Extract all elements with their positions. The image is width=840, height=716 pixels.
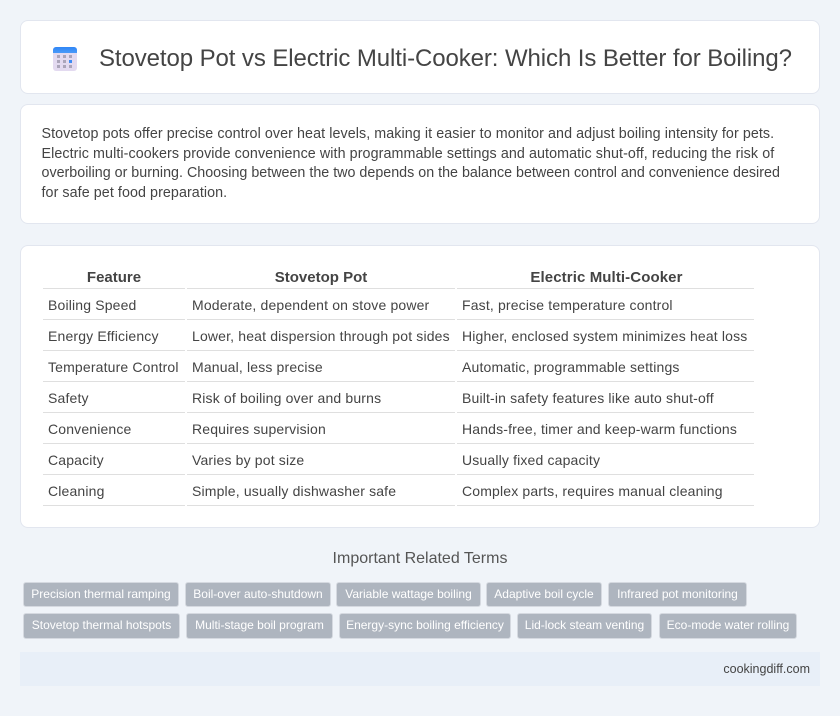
comparison table: Built-in safety features like auto shut-off: [462, 390, 714, 406]
comparison table: Automatic, programmable settings: [462, 359, 680, 375]
panel: comparison table: [20, 245, 820, 528]
comparison table: Fast, precise temperature control: [462, 297, 673, 313]
comparison table: Capacity: [48, 452, 104, 468]
tag: [23, 582, 179, 607]
tag: Lid-lock steam venting: [525, 618, 644, 632]
tag: [185, 582, 331, 607]
comparison table: Energy Efficiency: [48, 328, 159, 344]
comparison table: Cleaning: [48, 483, 105, 499]
comparison table: Boiling Speed: [48, 297, 136, 313]
tag: [659, 613, 797, 639]
column heading: Feature: Feature: [87, 269, 141, 286]
comparison table: Usually fixed capacity: [462, 452, 600, 468]
tag: Stovetop thermal hotspots: [32, 618, 171, 632]
column heading: Electric Multi-Cooker: Electric Multi-Cooker: [530, 269, 683, 286]
tag: [186, 613, 333, 639]
tag: [336, 582, 481, 607]
title: Stovetop Pot vs Electric Multi-Cooker: Which Is Better for Boiling?: [99, 45, 792, 72]
panel: introduction: [20, 104, 820, 224]
comparison table: Higher, enclosed system minimizes heat loss: [462, 328, 747, 344]
comparison table: Manual, less precise: [192, 359, 323, 375]
comparison table: Complex parts, requires manual cleaning: [462, 483, 723, 499]
tag: Precision thermal ramping: [31, 587, 171, 601]
comparison table: Hands-free, timer and keep-warm functions: [462, 421, 737, 437]
tag: [608, 582, 747, 607]
panel: header: [20, 20, 820, 94]
comparison table: Simple, usually dishwasher safe: [192, 483, 396, 499]
comparison table: Lower, heat dispersion through pot sides: [192, 328, 450, 344]
tag: Infrared pot monitoring: [617, 587, 738, 601]
text block: introduction: Stovetop pots offer precise control over heat levels, making it easier to monitor and adjust boiling intensity for pets.: [42, 126, 774, 142]
comparison table: Requires supervision: [192, 421, 326, 437]
footer: [20, 652, 820, 686]
comparison table: Risk of boiling over and burns: [192, 390, 381, 406]
comparison table: Varies by pot size: [192, 452, 304, 468]
footer: source: cookingdiff.com: [723, 662, 810, 676]
column heading: Stovetop Pot: Stovetop Pot: [275, 269, 367, 286]
icon: calendar: [53, 47, 77, 71]
tag: [517, 613, 652, 639]
heading: Important Related Terms: Important Related Terms: [333, 550, 507, 567]
comparison table: Convenience: [48, 421, 131, 437]
tag: Energy-sync boiling efficiency: [346, 618, 504, 632]
text block: introduction: overboiling or burning. Choosing between the two depends on the balance between control and convenience desired: [42, 165, 780, 181]
tag: Eco-mode water rolling: [667, 618, 789, 632]
comparison table: Temperature Control: [48, 359, 179, 375]
text block: introduction: for safe pet food preparation.: [42, 184, 227, 200]
tag: Boil-over auto-shutdown: [193, 587, 323, 601]
tag: [23, 613, 180, 639]
text block: introduction: [42, 126, 780, 200]
tag: [486, 582, 602, 607]
text block: introduction: Electric multi-cookers provide convenience with programmable settings and automatic shut-off, reducing the risk of: [42, 146, 774, 162]
tag: Multi-stage boil program: [195, 618, 324, 632]
tag: Variable wattage boiling: [345, 587, 472, 601]
tag: Adaptive boil cycle: [494, 587, 594, 601]
comparison table: Moderate, dependent on stove power: [192, 297, 429, 313]
comparison table: Safety: [48, 390, 89, 406]
tag: [339, 613, 511, 639]
